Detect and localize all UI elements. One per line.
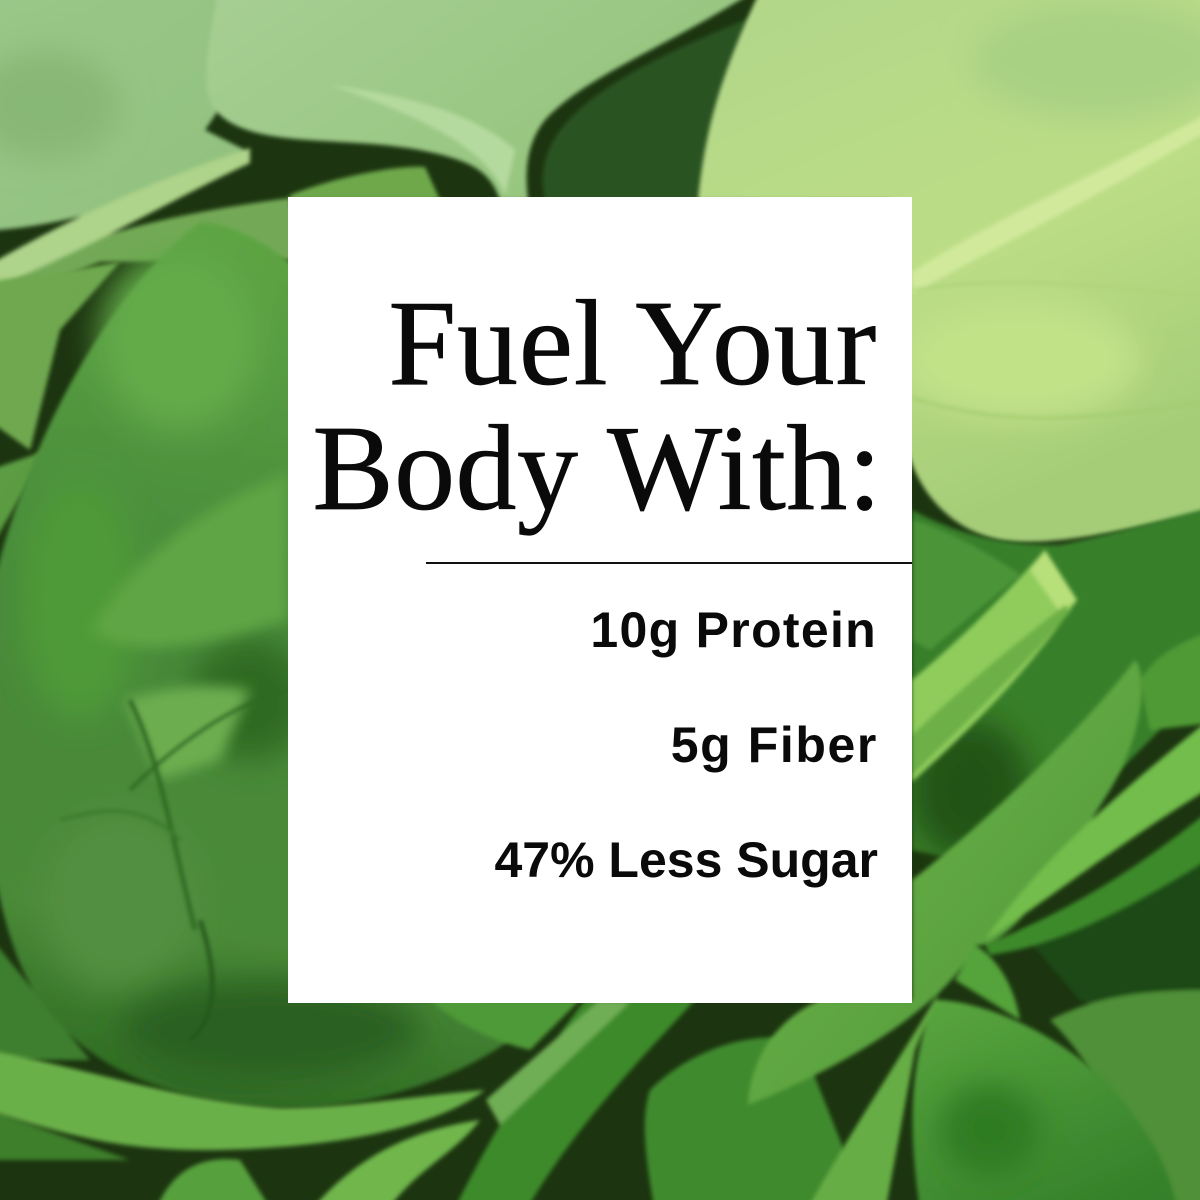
stem: cut stem on right: [912, 550, 1077, 782]
shadow gap between top leaves: [543, 10, 770, 200]
leaf: top middle: [206, 0, 800, 200]
stat: sugar: 47% Less Sugar: [494, 832, 878, 888]
divider rule: [426, 562, 912, 564]
leaf: bottom left light blades: [0, 1000, 580, 1200]
leaf: mid right dark background: [910, 500, 1200, 1200]
leaf: lower centre: [645, 1037, 880, 1200]
stem: bottom centre: [440, 1000, 695, 1200]
leaf: top left: [0, 0, 440, 320]
heading: Fuel Your: [388, 276, 877, 411]
leaf: small leaves at far left: [0, 262, 120, 600]
heading: Body With:: [312, 401, 882, 536]
stat: protein: 10g Protein: [590, 602, 877, 658]
white text panel: [288, 197, 912, 1003]
heading: [312, 276, 882, 536]
stat: fiber: 5g Fiber: [671, 717, 878, 773]
leaf: top right, large and pale: [698, 0, 1200, 542]
leaf: bottom right: [748, 660, 1200, 1200]
leaf: large dark left leaf: [0, 222, 510, 1107]
